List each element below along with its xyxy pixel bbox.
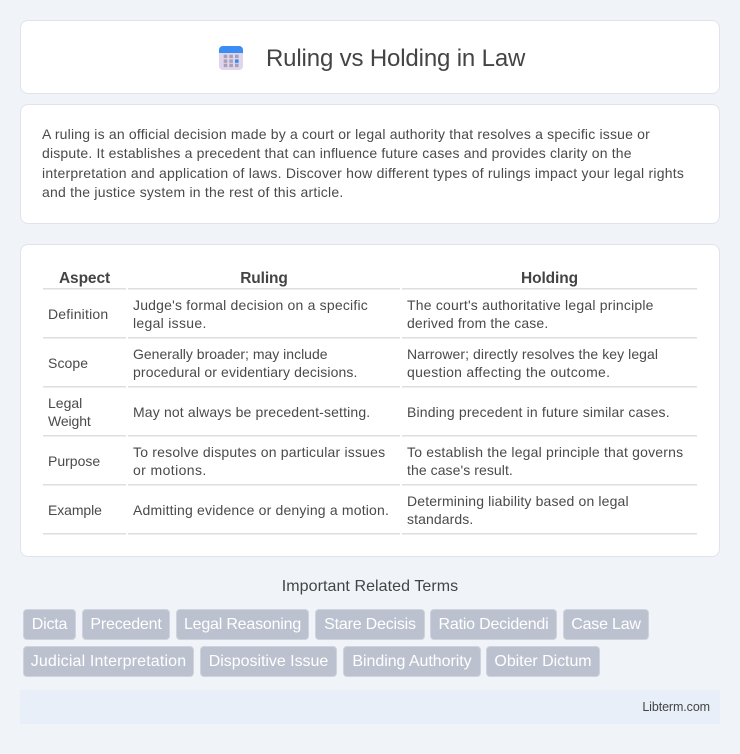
row: purpose: Purpose bbox=[48, 453, 100, 469]
footer bbox=[20, 690, 720, 724]
table header: Holding bbox=[521, 270, 578, 287]
row: legal weight: Weight bbox=[48, 413, 91, 429]
row: definition: Definition bbox=[48, 306, 108, 322]
row: definition: derived from the case. bbox=[407, 315, 548, 331]
row: scope: Scope bbox=[48, 355, 88, 371]
row: scope: Narrower; directly resolves the key legal bbox=[407, 346, 658, 362]
footer: source: Libterm.com bbox=[642, 700, 710, 714]
heading: important related terms: Important Related Terms bbox=[282, 578, 458, 595]
text block: introduction bbox=[42, 126, 684, 200]
row: legal weight bbox=[48, 395, 670, 429]
tags: related terms: Case Law bbox=[571, 616, 641, 633]
title: Ruling vs Holding in Law bbox=[266, 45, 525, 72]
row: example: Example bbox=[48, 502, 102, 518]
row: legal weight: May not always be precedent-setting. bbox=[133, 404, 370, 420]
text block: introduction: dispute. It establishes a precedent that can influence future cases and provides clarity on the bbox=[42, 145, 632, 161]
row: scope bbox=[48, 346, 658, 380]
table header bbox=[59, 270, 578, 287]
tags: related terms: Binding Authority bbox=[352, 653, 472, 670]
panel: comparison table bbox=[20, 244, 720, 557]
tags: related terms: Dicta bbox=[32, 616, 67, 633]
tags: related terms: Stare Decisis bbox=[324, 616, 416, 633]
row: example: standards. bbox=[407, 511, 473, 527]
tags: related terms: Dispositive Issue bbox=[209, 653, 328, 670]
row: example bbox=[48, 493, 629, 527]
text block: introduction: interpretation and application of laws. Discover how different types of rulings impact your legal rights bbox=[42, 165, 684, 181]
row: example: Determining liability based on legal bbox=[407, 493, 629, 509]
row: definition: Judge's formal decision on a specific bbox=[133, 297, 368, 313]
tags: related terms: Obiter Dictum bbox=[494, 653, 592, 670]
row: scope: procedural or evidentiary decisions. bbox=[133, 364, 358, 380]
row: purpose bbox=[48, 444, 683, 478]
row: scope: Generally broader; may include bbox=[133, 346, 328, 362]
table header: Aspect bbox=[59, 270, 110, 287]
row: definition bbox=[48, 297, 654, 331]
row: purpose: To resolve disputes on particular issues bbox=[133, 444, 385, 460]
row: definition: legal issue. bbox=[133, 315, 207, 331]
row: legal weight: Binding precedent in future similar cases. bbox=[407, 404, 670, 420]
tags: related terms: Legal Reasoning bbox=[184, 616, 301, 633]
panel: introduction bbox=[20, 104, 720, 224]
row: example: Admitting evidence or denying a motion. bbox=[133, 502, 389, 518]
tags: related terms: Precedent bbox=[90, 616, 162, 633]
panel: title card bbox=[20, 20, 720, 94]
row: scope: question affecting the outcome. bbox=[407, 364, 610, 380]
text block: introduction: and the justice system in the rest of this article. bbox=[42, 184, 343, 200]
tags: related terms: Judicial Interpretation bbox=[31, 653, 186, 670]
row: purpose: To establish the legal principle that governs bbox=[407, 444, 683, 460]
text block: introduction: A ruling is an official decision made by a court or legal authority that resolves a specific issue or bbox=[42, 126, 650, 142]
tags: related terms bbox=[23, 609, 649, 677]
tags: related terms: Ratio Decidendi bbox=[439, 616, 548, 633]
table header: Ruling bbox=[240, 270, 288, 287]
icon: calendar bbox=[219, 46, 243, 70]
row: definition: The court's authoritative legal principle bbox=[407, 297, 654, 313]
row: purpose: the case's result. bbox=[407, 462, 513, 478]
row: legal weight: Legal bbox=[48, 395, 82, 411]
row: purpose: or motions. bbox=[133, 462, 207, 478]
